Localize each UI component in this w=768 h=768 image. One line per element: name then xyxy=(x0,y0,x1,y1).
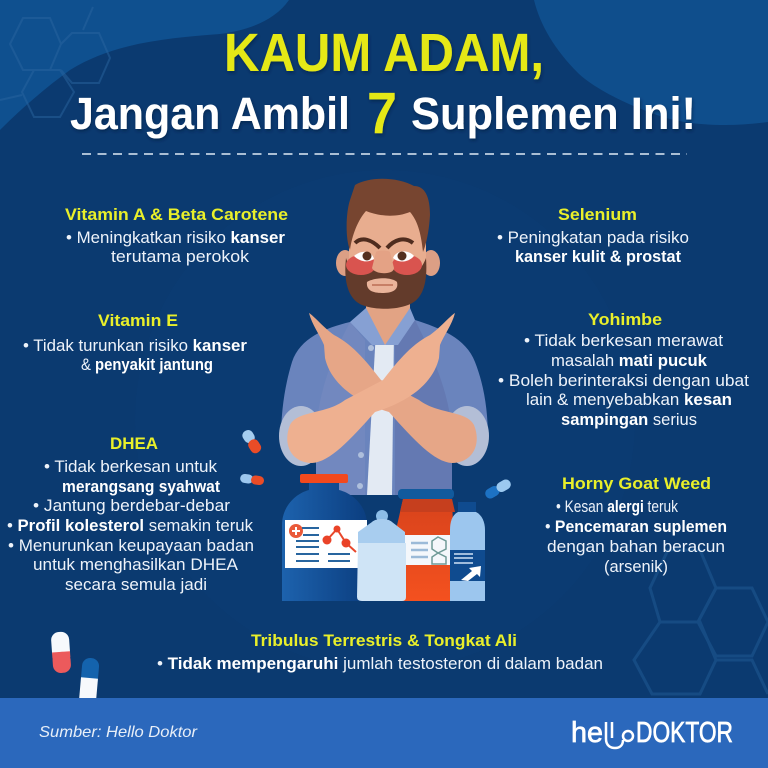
eyes xyxy=(354,251,414,262)
beard xyxy=(345,258,426,309)
source credit: Sumber: Hello Doktor xyxy=(39,724,198,741)
shirt buttons xyxy=(357,345,374,489)
panel: Selenium xyxy=(497,205,689,266)
text block: terutama perokok xyxy=(111,248,250,266)
small blue bottle xyxy=(450,502,485,601)
mouth xyxy=(367,278,397,293)
panel: Yohimbe xyxy=(498,310,749,429)
text block: secara semula jadi xyxy=(65,576,207,594)
illustration: angry man crossing arms xyxy=(279,179,489,495)
pill bottom left, white and red xyxy=(51,631,71,674)
text block: • Pencemaran suplemen xyxy=(545,518,727,536)
heading: Selenium xyxy=(558,205,637,224)
text block: • Menurunkan keupayaan badan xyxy=(8,537,254,555)
illustration: supplement bottles xyxy=(282,474,485,601)
title line 2: 7 xyxy=(367,81,397,146)
text block: untuk menghasilkan DHEA xyxy=(33,556,238,574)
label xyxy=(285,520,367,568)
text block: • Boleh berinteraksi dengan ubat xyxy=(498,372,749,390)
text block xyxy=(498,332,749,429)
panel: Vitamin E xyxy=(23,311,248,374)
text block: & penyakit jantung xyxy=(81,356,213,374)
title line 2 xyxy=(70,81,696,146)
hair xyxy=(347,179,430,252)
text block xyxy=(7,458,254,594)
light baby-style bottle xyxy=(357,510,406,601)
pill right xyxy=(483,478,513,500)
eyebrows xyxy=(355,239,413,248)
heading: Horny Goat Weed xyxy=(562,474,711,493)
text block: merangsang syahwat xyxy=(62,478,220,496)
text block xyxy=(66,229,286,266)
red eye bags xyxy=(346,255,422,275)
panel: DHEA xyxy=(7,434,254,594)
text block: • Jantung berdebar-debar xyxy=(33,497,231,515)
arm from lower left to upper right xyxy=(287,313,455,463)
pill middle left xyxy=(240,473,265,486)
title line 2: Suplemen Ini! xyxy=(411,88,696,139)
text block xyxy=(23,337,248,374)
text block: masalah mati pucuk xyxy=(551,352,708,370)
text block: • Peningkatan pada risiko xyxy=(497,229,689,247)
pill upper left xyxy=(240,428,263,455)
panel: Vitamin A and Beta Carotene xyxy=(65,205,288,266)
text block: dengan bahan beracun xyxy=(547,538,725,556)
ears xyxy=(336,250,440,276)
text block: lain & menyebabkan kesan xyxy=(526,391,732,409)
heading: DHEA xyxy=(110,434,158,453)
text block: kanser kulit & prostat xyxy=(515,248,681,266)
pills around the bottles xyxy=(240,428,513,500)
neck xyxy=(366,300,410,345)
decorative hexagon pattern: bottom right xyxy=(634,550,768,694)
footer bar xyxy=(0,698,768,768)
pill bottom left, blue and white xyxy=(79,657,100,701)
decorative hexagon pattern: top left xyxy=(0,7,110,117)
title line 2: Jangan Ambil xyxy=(70,88,350,139)
heading: Tribulus Terrestris & Tongkat Ali xyxy=(251,631,517,650)
logo: hello doktor: DOKTOR xyxy=(636,717,733,749)
heading: Yohimbe xyxy=(588,310,662,329)
text block: sampingan serius xyxy=(561,411,697,429)
text block: (arsenik) xyxy=(604,558,668,576)
nose xyxy=(372,250,394,273)
torso shirt xyxy=(281,320,488,495)
panel: Tribulus Terrestris and Tongkat Ali xyxy=(157,631,603,673)
title xyxy=(70,23,696,146)
logo: hello doktor xyxy=(571,717,733,749)
title line 1: KAUM ADAM, xyxy=(224,23,544,83)
heading: Vitamin E xyxy=(98,311,178,330)
heading: Vitamin A & Beta Carotene xyxy=(65,205,288,224)
left elbow cuff xyxy=(279,406,323,466)
white undershirt xyxy=(367,330,394,495)
dashed divider xyxy=(82,153,687,155)
large blue bottle xyxy=(282,474,367,601)
right elbow cuff xyxy=(445,406,489,466)
logo: hello doktor: he xyxy=(571,717,603,749)
text block: • Kesan alergi teruk xyxy=(556,498,679,516)
orange jar xyxy=(396,489,456,601)
text block: • Tidak berkesan untuk xyxy=(44,458,218,476)
text block xyxy=(497,229,689,266)
text block: • Profil kolesterol semakin teruk xyxy=(7,517,254,535)
text block: • Meningkatkan risiko kanser xyxy=(66,229,286,247)
text block xyxy=(545,498,727,576)
face xyxy=(349,208,426,305)
arm from lower right to upper left xyxy=(309,313,477,463)
panel: Horny Goat Weed xyxy=(545,474,727,576)
collar xyxy=(350,308,415,345)
text block: • Tidak mempengaruhi jumlah testosteron di dalam badan xyxy=(157,655,603,673)
text block: • Tidak berkesan merawat xyxy=(524,332,723,350)
text block: • Tidak turunkan risiko kanser xyxy=(23,337,248,355)
